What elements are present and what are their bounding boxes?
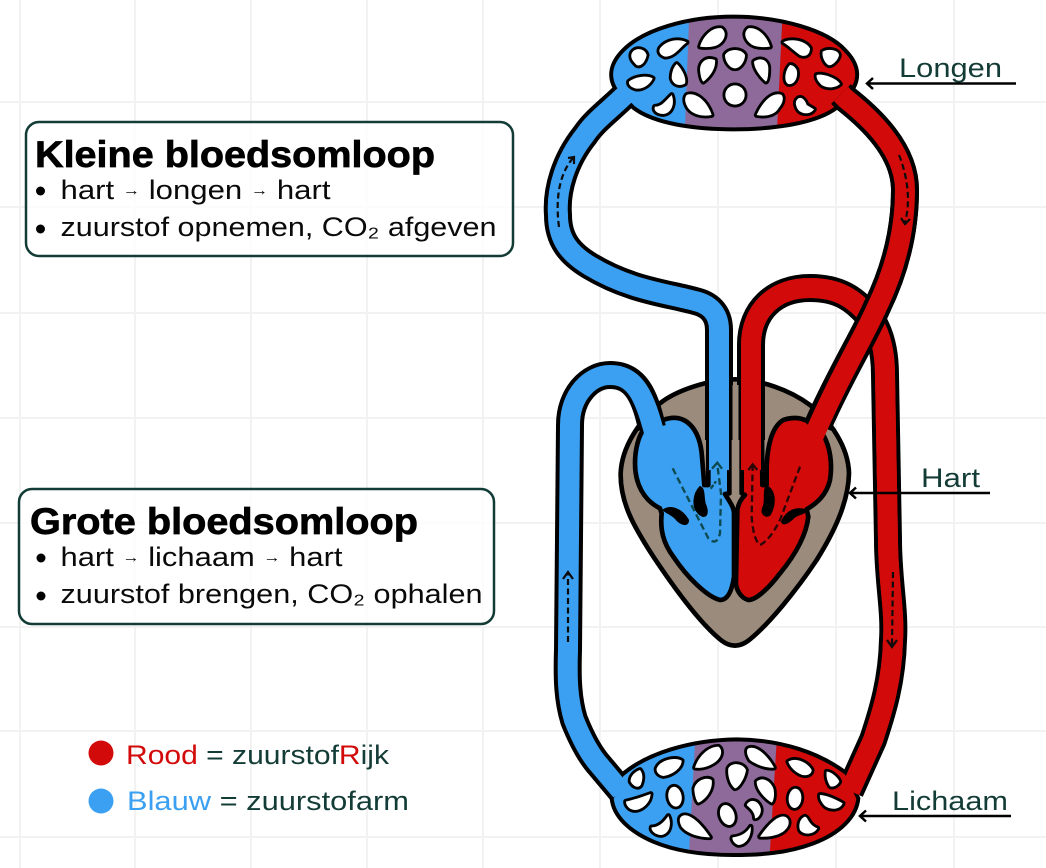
- label: lichaam: Lichaam: [892, 786, 1008, 816]
- body capillaries: [610, 737, 860, 857]
- bullet text: hart lichaam hart: →: [263, 549, 281, 566]
- vessel: grote bloedsomloop, blue vein: [568, 375, 652, 791]
- bullet text: hart lichaam hart: lichaam: [140, 542, 263, 572]
- label: hart: Hart: [921, 463, 981, 493]
- arrow: red flow in heart: [748, 464, 800, 545]
- label: longen: Longen: [899, 53, 1002, 83]
- bullet text: hart longen hart: hart: [268, 175, 331, 205]
- vessel: pulmonary vein, red: [818, 94, 905, 425]
- arrow: flow up pulmonary artery: [558, 157, 574, 227]
- lung capillaries: [609, 14, 860, 132]
- label: longen: [867, 53, 1016, 89]
- arrow: flow down aorta: [887, 572, 897, 647]
- arrow: flow down pulmonary vein: [899, 155, 910, 224]
- vessel fills over junctions: [558, 92, 905, 791]
- bullet text: hart lichaam hart: hart: [60, 542, 107, 572]
- legend item: rood: Rood = zuurstof Rijk: [126, 740, 390, 770]
- bullet text: zuurstof opnemen: zuurstof opnemen, CO₂ afgeven: [60, 212, 496, 242]
- bullet text: hart longen hart: →: [123, 182, 140, 199]
- heart: blue chambers: [635, 370, 734, 600]
- arrow: blue flow in heart: [673, 463, 722, 542]
- heart valves and flow arrows: [663, 463, 807, 545]
- legend: [88, 740, 409, 816]
- label: hart: [850, 463, 990, 498]
- bullet text: hart lichaam hart: hart: [281, 542, 343, 572]
- bullet text: hart lichaam hart: [36, 542, 343, 572]
- heart valves: [663, 486, 807, 524]
- arrow: flow up body vein: [563, 572, 573, 642]
- bullet text: hart longen hart: [36, 175, 331, 205]
- bullet text: hart longen hart: hart: [60, 175, 107, 205]
- legend item: blauw: Blauw = zuurstofarm: [127, 786, 409, 816]
- bullet text: hart lichaam hart: →: [122, 549, 140, 566]
- heading: grote bloedsomloop: Grote bloedsomloop: [30, 501, 418, 542]
- bullet text: hart longen hart: longen: [140, 175, 251, 205]
- panel: kleine bloedsomloop: [26, 122, 513, 256]
- bullet text: hart longen hart: →: [251, 182, 268, 199]
- vessel: aorta, red artery: [751, 288, 893, 791]
- heart: [621, 370, 849, 646]
- bullet text: zuurstof brengen: zuurstof brengen, CO₂ ophalen: [60, 579, 483, 609]
- vessel: pulmonary artery, blue: [558, 92, 719, 440]
- heart: red chambers: [736, 370, 831, 600]
- heading: kleine bloedsomloop: Kleine bloedsomloop: [35, 134, 435, 175]
- label: lichaam: [860, 786, 1011, 822]
- panel: grote bloedsomloop: [19, 489, 494, 624]
